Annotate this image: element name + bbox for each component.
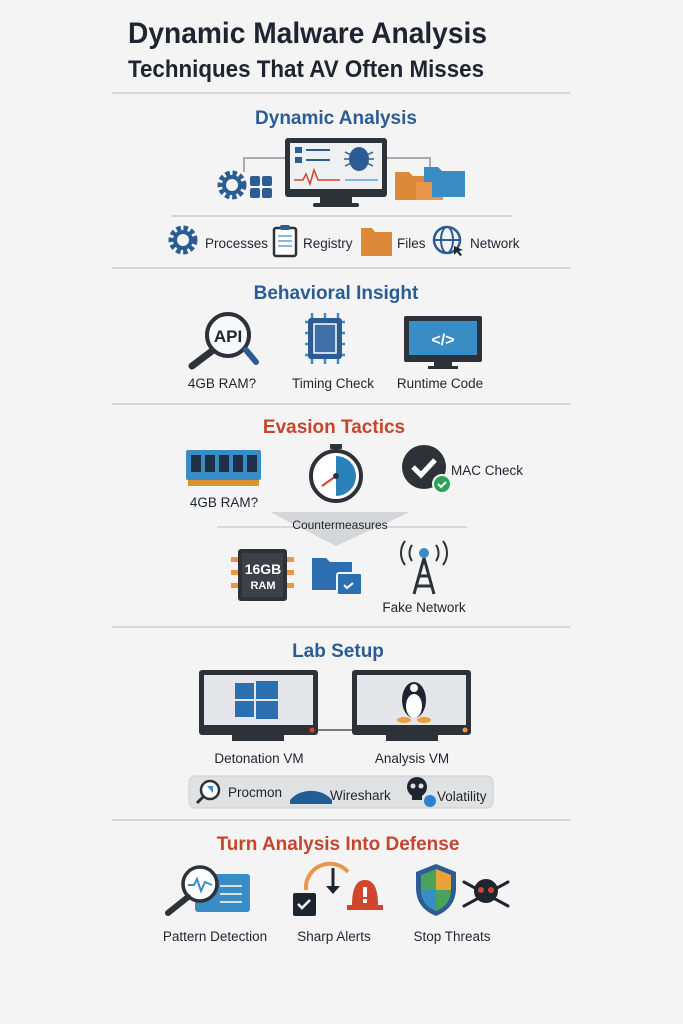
icon: fake network tower: Fake Network <box>382 600 466 615</box>
row: processes registry files network: Registry <box>303 236 353 251</box>
icon: analysis VM: Analysis VM <box>375 751 449 766</box>
labels: behavioral: Timing Check <box>292 376 374 391</box>
icon: fake network tower <box>382 541 466 615</box>
icon: API magnifier: API <box>214 327 242 346</box>
row: processes registry files network <box>172 225 520 256</box>
icon: folders <box>395 167 465 200</box>
icon: pattern detection: Pattern Detection <box>163 929 267 944</box>
arrow: countermeasures <box>217 512 467 546</box>
icon: RAM stick: 4GB RAM? <box>190 495 258 510</box>
connector lines <box>244 158 430 172</box>
icon: chip <box>305 313 345 364</box>
icon: MAC check: MAC Check <box>451 463 523 478</box>
title <box>128 17 487 83</box>
labels: behavioral: 4GB RAM? <box>188 376 256 391</box>
tools bar: Volatility <box>437 789 487 804</box>
icon: 16GB RAM chip: 16GB <box>245 561 281 577</box>
icon: sharp alerts <box>293 864 383 944</box>
heading: turn analysis into defense: Turn Analysis Into Defense <box>217 834 459 855</box>
icon: gear and grid <box>221 174 272 198</box>
labels: behavioral: Runtime Code <box>397 376 483 391</box>
heading: behavioral insight: Behavioral Insight <box>254 283 419 304</box>
icon: code monitor <box>404 316 482 369</box>
icon: API magnifier <box>192 314 256 366</box>
icon: MAC check <box>402 445 523 493</box>
icon: detonation VM: Detonation VM <box>214 751 304 766</box>
row: processes registry files network: Processes <box>205 236 268 251</box>
icon: RAM stick <box>186 450 261 510</box>
tools bar <box>189 776 493 808</box>
heading: lab setup: Lab Setup <box>292 641 384 662</box>
connector <box>318 729 352 731</box>
title: Techniques That AV Often Misses <box>128 56 484 83</box>
icon: stopwatch <box>311 444 361 501</box>
icon: 16GB RAM chip <box>231 549 294 601</box>
row: processes registry files network: Network <box>470 236 520 251</box>
icon: sharp alerts: Sharp Alerts <box>297 929 371 944</box>
icon: stop threats <box>413 864 508 944</box>
arrow: countermeasures: Countermeasures <box>292 518 388 532</box>
row: processes registry files network: Files <box>397 236 426 251</box>
icon: code monitor: </> <box>431 332 455 349</box>
icon: detonation VM <box>199 670 318 766</box>
icon: stop threats: Stop Threats <box>413 929 491 944</box>
heading: evasion tactics: Evasion Tactics <box>263 417 405 438</box>
tools bar: Procmon <box>228 785 282 800</box>
icon: analysis VM <box>352 670 471 766</box>
tools bar: Wireshark <box>330 788 391 803</box>
icon: blue folder check <box>312 558 362 595</box>
icon: monitor with bug <box>285 138 387 207</box>
icon: pattern detection <box>163 867 267 944</box>
labels: behavioral <box>188 376 483 391</box>
heading: dynamic analysis: Dynamic Analysis <box>255 108 417 129</box>
icon: 16GB RAM chip: RAM <box>250 580 276 592</box>
title: Dynamic Malware Analysis <box>128 17 487 50</box>
